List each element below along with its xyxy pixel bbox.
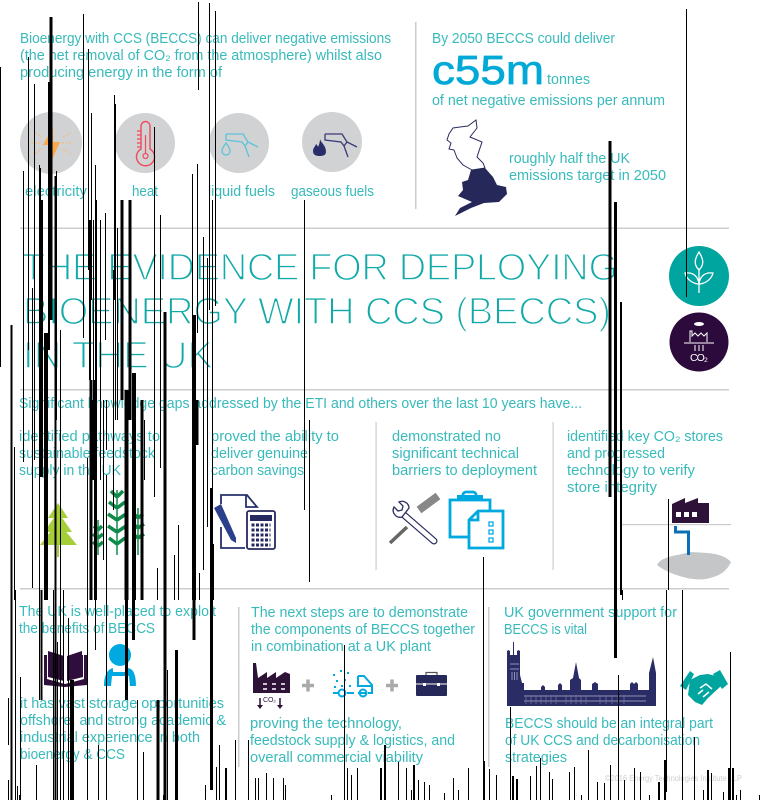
icon: plus — [302, 680, 314, 692]
panel: no technical barriers: significant technical — [392, 446, 519, 462]
panel: government support: BECCS should be an integral part — [505, 716, 713, 732]
panel: UK well placed: the benefits of BECCS — [19, 621, 155, 637]
panel: carbon savings: proved the ability to — [211, 429, 339, 445]
icon: handshake — [680, 670, 728, 705]
icon: electricity — [20, 112, 82, 174]
divider — [238, 607, 240, 767]
title — [22, 247, 618, 377]
stat comparison text — [509, 151, 666, 184]
divider — [488, 607, 490, 767]
icon: crops — [93, 490, 144, 555]
copyright: ©2016 Energy Technologies Institute LLP — [605, 773, 742, 783]
icon: clipboard — [450, 492, 503, 548]
title: BIOENERGY WITH CCS (BECCS) — [23, 291, 611, 333]
stat lead-in: By 2050 BECCS could deliver — [432, 31, 615, 47]
intro text: producing energy in the form of — [20, 65, 223, 81]
panel: next steps: the components of BECCS together — [251, 622, 475, 638]
panel: CO2 stores — [567, 429, 731, 579]
title: THE EVIDENCE FOR DEPLOYING — [22, 247, 618, 289]
panel: next steps: proving the technology, — [250, 716, 402, 732]
intro text: (the net removal of CO₂ from the atmosphere) whilst also — [20, 48, 382, 64]
unit: tonnes — [547, 72, 590, 88]
panel: feedstock pathways: identified pathways to — [19, 429, 160, 445]
panel: what BECCS delivers — [20, 31, 391, 200]
icon: document and calculator — [214, 495, 275, 549]
panel: next steps — [250, 605, 475, 766]
stat comparison text: roughly half the UK — [509, 151, 630, 167]
panel: government support: UK government support for — [504, 605, 677, 621]
panel: government support: BECCS is vital — [504, 622, 587, 638]
panel: no technical barriers — [390, 429, 537, 548]
icon: leaf badge — [669, 246, 729, 306]
divider — [552, 422, 554, 570]
panel: carbon savings: carbon savings — [211, 463, 304, 479]
panel: government support — [504, 605, 728, 766]
title: IN THE UK — [23, 335, 213, 377]
label: heat: heat — [132, 184, 158, 200]
stat comparison text: emissions target in 2050 — [509, 168, 666, 184]
icon: parliament — [507, 642, 656, 706]
panel: UK well placed: it has vast storage opportunities — [20, 696, 224, 712]
subheading: Significant knowledge gaps addressed by the ETI and others over the last 10 years have... — [19, 396, 582, 412]
big number: c55m — [432, 47, 544, 93]
icon: UK map — [447, 120, 507, 216]
panel: UK well placed: offshore, and strong academic & — [20, 713, 226, 729]
icon: liquid fuels — [209, 113, 269, 173]
panel: c55m statistic — [415, 22, 666, 216]
panel: CO2 stores: identified key CO₂ stores — [567, 429, 723, 445]
icon: gaseous fuels — [302, 112, 362, 172]
intro text — [20, 31, 391, 81]
label: electricity: electricity — [25, 184, 88, 200]
panel: feedstock pathways: sustainable feedstock — [19, 446, 156, 462]
divider — [376, 422, 377, 570]
icon: factory with CO2: CO₂ — [263, 697, 276, 704]
panel: CO2 stores: store integrity — [567, 480, 658, 496]
panel: carbon savings: deliver genuine — [211, 446, 308, 462]
icon: truck — [333, 671, 372, 696]
panel: feedstock pathways — [19, 429, 160, 557]
panel: UK well placed: industrial experience in both — [20, 730, 200, 746]
panel: next steps: overall commercial viability — [250, 750, 424, 766]
icon: CO2 badge — [670, 312, 728, 372]
panel: UK well placed — [19, 604, 226, 763]
panel: next steps: in combination at a UK plant — [251, 639, 431, 655]
intro text: Bioenergy with CCS (BECCS) can deliver negative emissions — [20, 31, 391, 47]
panel: carbon savings — [211, 429, 339, 549]
panel: UK well placed: The UK is well-placed to exploit — [19, 604, 216, 620]
panel: CO2 stores: technology to verify — [567, 463, 696, 479]
icon: briefcase — [416, 672, 447, 696]
panel: government support: strategies — [505, 750, 567, 766]
icon: heat — [115, 113, 175, 173]
icon: person with headset — [104, 644, 136, 686]
stat description: of net negative emissions per annum — [432, 93, 665, 109]
icon: book — [44, 651, 87, 687]
panel: no technical barriers: demonstrated no — [392, 429, 501, 445]
label: liquid fuels: liquid fuels — [208, 184, 275, 200]
panel: government support: of UK CCS and decarbonisation — [505, 733, 700, 749]
panel: next steps: The next steps are to demonstrate — [251, 605, 468, 621]
icon: factory with CO2 — [253, 663, 290, 709]
panel: feedstock pathways: supply in the UK — [19, 463, 121, 479]
panel: UK well placed: bioenergy & CCS — [20, 747, 125, 763]
label: gaseous fuels: gaseous fuels — [291, 184, 374, 200]
icon: CO2 badge: CO₂ — [690, 352, 708, 364]
icon: tree — [40, 503, 77, 557]
panel: CO2 stores: and progressed — [567, 446, 665, 462]
icon: tools — [390, 496, 438, 543]
icon: plus — [386, 680, 398, 692]
icon: factory and storage — [657, 498, 731, 579]
panel: no technical barriers: barriers to deployment — [392, 463, 537, 479]
panel: next steps: feedstock supply & logistics, and — [250, 733, 455, 749]
